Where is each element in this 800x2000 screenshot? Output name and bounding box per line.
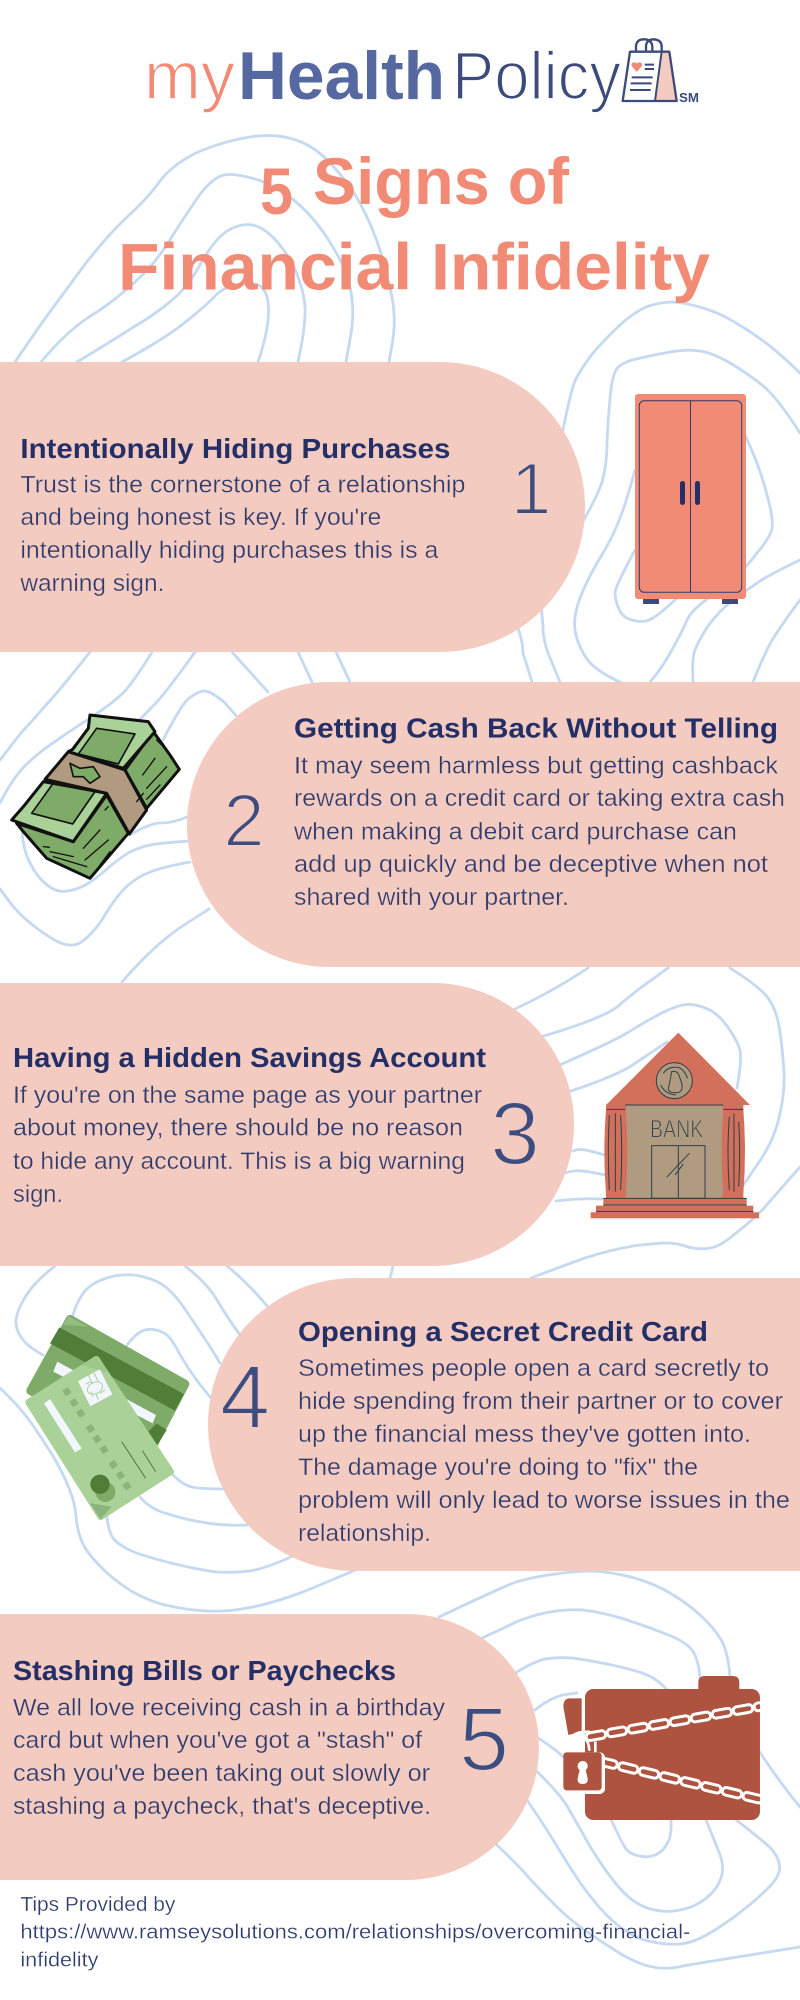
text: sign 4 body [298, 1355, 790, 1547]
heading: sign 5: Stashing Bills or Paychecks [13, 1655, 396, 1686]
footer: source credit: Tips Provided by [20, 1894, 175, 1916]
panel: sign 2 getting cash back [187, 682, 800, 967]
panel: sign 4 secret credit card [208, 1278, 800, 1571]
text: sign 3 body: about money, there should be no reason [13, 1114, 463, 1142]
text: sign 3 body: sign. [13, 1181, 63, 1208]
text: sign 5 body: card but when you've got a "stash" of [13, 1727, 422, 1754]
title [118, 144, 710, 304]
icon: locked wallet with chains [563, 1676, 767, 1820]
text: sign 1 body: warning sign. [19, 570, 164, 597]
icon: bank building: BANK [650, 1116, 703, 1144]
panel: sign 5 stashing bills [0, 1614, 539, 1880]
text: sign 2 body: when making a debit card purchase can [293, 819, 737, 846]
text: sign 1 body: intentionally hiding purchases this is a [20, 537, 439, 564]
heading: sign 3: Having a Hidden Savings Account [13, 1042, 486, 1073]
text: sign 2 body [293, 752, 785, 911]
text: sign 4 body: problem will only lead to worse issues in the [298, 1487, 790, 1514]
text: sign 4 body: hide spending from their partner or to cover [298, 1388, 783, 1415]
heading: sign 4: Opening a Secret Credit Card [298, 1316, 708, 1347]
text: sign 5 body: cash you've been taking out slowly or [13, 1760, 430, 1787]
icon: wardrobe [635, 394, 746, 604]
number 1: 1 [511, 449, 551, 530]
text: sign 5 body [13, 1694, 445, 1820]
logo: myHealthPolicy: Policy [452, 38, 621, 114]
text: sign 3 body [13, 1082, 482, 1208]
footer: source credit: https://www.ramseysolutions.com/relationships/overcoming-financial- [20, 1922, 690, 1944]
panel: sign 1 intentionally hiding purchases [0, 362, 585, 652]
text: sign 2 body: It may seem harmless but getting cashback [294, 752, 779, 780]
text: sign 4 body: relationship. [298, 1520, 431, 1547]
number 4: 4 [220, 1348, 270, 1448]
footer: source credit: infidelity [20, 1950, 98, 1972]
text: sign 5 body: stashing a paycheck, that's deceptive. [13, 1793, 431, 1820]
logo: myHealthPolicy: Health [238, 38, 445, 114]
title: 5 [260, 154, 293, 228]
panel: sign 3 hidden savings account [0, 983, 574, 1266]
title: Financial Infidelity [118, 230, 710, 304]
text: sign 1 body [19, 471, 465, 597]
text: sign 5 body: We all love receiving cash in a birthday [13, 1694, 445, 1722]
logo: myHealthPolicy: SM [679, 90, 699, 105]
icon: bank building [591, 1033, 759, 1218]
text: sign 4 body: Sometimes people open a card secretly to [298, 1355, 769, 1382]
text: sign 1 body: Trust is the cornerstone of a relationship [20, 471, 465, 498]
icon: stack of money [12, 715, 179, 878]
number 3: 3 [490, 1083, 540, 1183]
text: sign 1 body: and being honest is key. If you're [20, 504, 381, 531]
heading: sign 1: Intentionally Hiding Purchases [20, 433, 450, 464]
title: Signs of [313, 144, 570, 218]
logo: myHealthPolicy: my [144, 38, 235, 114]
text: sign 3 body: to hide any account. This is a big warning [13, 1148, 465, 1175]
footer: source credit [20, 1894, 690, 1972]
logo: myHealthPolicy [144, 38, 699, 114]
number 2: 2 [223, 779, 265, 862]
text: sign 4 body: The damage you're doing to "fix" the [298, 1454, 698, 1481]
number 5: 5 [459, 1690, 509, 1790]
text: sign 3 body: If you're on the same page as your partner [13, 1082, 482, 1109]
text: sign 2 body: add up quickly and be deceptive when not [294, 851, 768, 878]
text: sign 2 body: shared with your partner. [294, 884, 569, 911]
icon: credit cards [29, 1316, 185, 1519]
heading: sign 2: Getting Cash Back Without Telling [294, 712, 778, 744]
text: sign 4 body: up the financial mess they've gotten into. [298, 1421, 751, 1448]
text: sign 2 body: rewards on a credit card or taking extra cash [294, 785, 785, 812]
